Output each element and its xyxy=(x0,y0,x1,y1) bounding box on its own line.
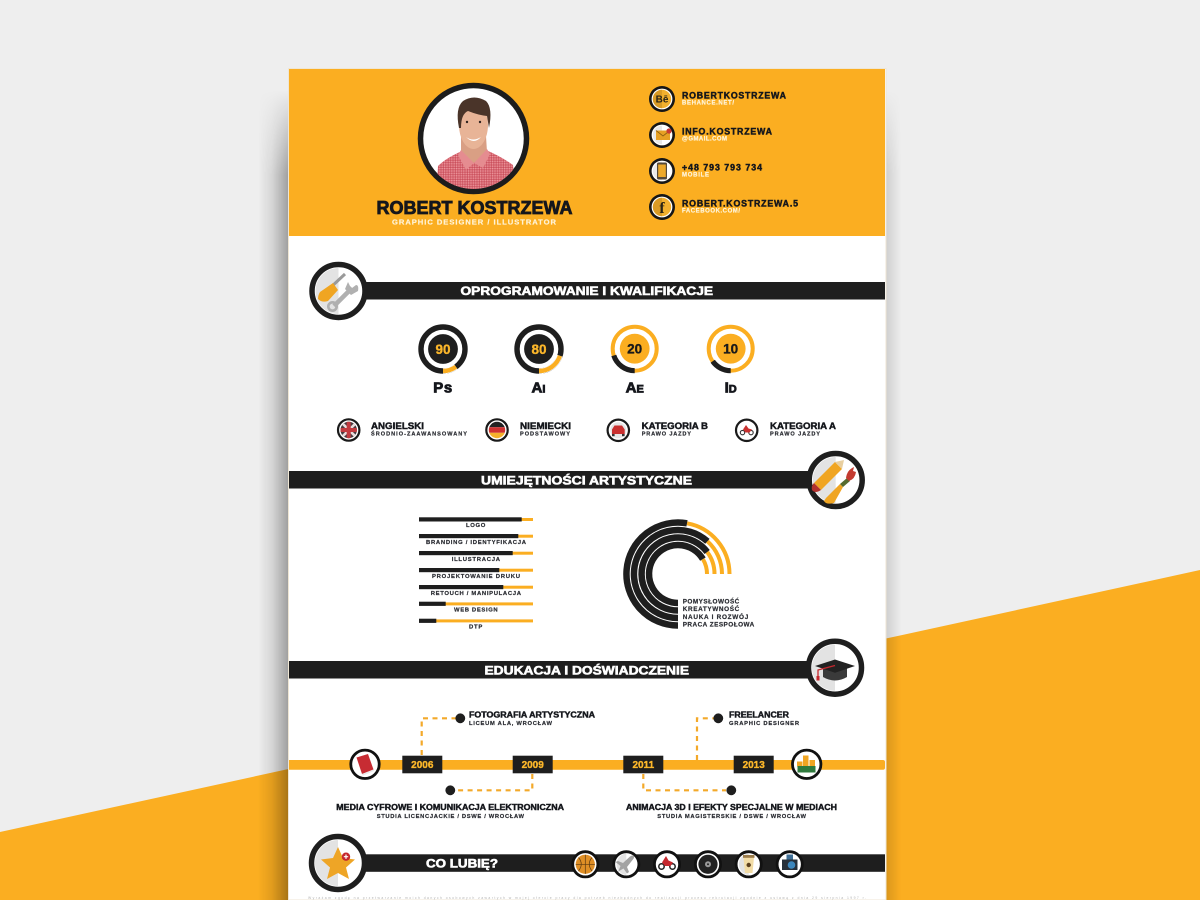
contact: email: @GMAIL.COM xyxy=(682,137,727,143)
language: English xyxy=(338,419,467,441)
contact: facebook xyxy=(649,194,798,220)
radial chart legend: PRACA ZESPOŁOWA xyxy=(683,622,755,629)
contact: phone: MOBILE xyxy=(682,173,709,179)
event: freelancer: FREELANCER xyxy=(729,709,790,719)
icon: camera xyxy=(777,852,802,877)
year: 2011: 2011 xyxy=(632,760,655,771)
contact: phone: +48 793 793 734 xyxy=(682,162,762,172)
section heading: software xyxy=(312,264,885,318)
skill ring: Ps 90: Ps xyxy=(433,379,453,396)
contact: facebook: ROBERT.KOSTRZEWA.5 xyxy=(682,198,798,208)
page shadow xyxy=(258,90,901,900)
radial chart legend: NAUKA I ROZWÓJ xyxy=(683,612,749,621)
contact: facebook: FACEBOOK.COM/ xyxy=(682,209,740,215)
year: 2009 xyxy=(513,756,553,773)
event: photography: FOTOGRAFIA ARTYSTYCZNA xyxy=(469,709,596,719)
year: 2009: 2009 xyxy=(522,760,544,771)
year: 2011 xyxy=(623,756,663,773)
contact: email xyxy=(649,122,773,148)
icon: graduation cap xyxy=(808,641,862,694)
job title: GRAPHIC DESIGNER / ILLUSTRATOR xyxy=(392,218,557,227)
bar: dtp: DTP xyxy=(469,624,482,630)
event: freelancer xyxy=(713,709,800,727)
event: photography: LICEUM ALA, WROCŁAW xyxy=(469,721,553,727)
licence: category A xyxy=(736,420,836,441)
timeline xyxy=(289,709,885,820)
event: master studies: STUDIA MAGISTERSKIE / DSWE / WROCŁAW xyxy=(657,814,807,820)
skill ring: Ai 80 xyxy=(517,327,561,396)
section heading: education xyxy=(289,641,862,694)
icon: plane xyxy=(614,852,639,877)
contact: behance xyxy=(649,86,787,112)
page sheet xyxy=(288,68,886,900)
event: freelancer: GRAPHIC DESIGNER xyxy=(729,721,800,727)
section heading: interests xyxy=(312,836,885,890)
section heading: software: OPROGRAMOWANIE I KWALIFIKACJE xyxy=(460,284,713,298)
bar: logo: LOGO xyxy=(466,523,486,529)
skill ring: Ae 20 xyxy=(613,327,657,396)
event: master studies xyxy=(626,785,837,820)
dashed connectors xyxy=(422,718,726,790)
skill ring: Ae 20: 20 xyxy=(627,342,642,357)
contact: behance: BEHANCE.NET/ xyxy=(682,101,734,107)
section heading: artistic skills: UMIEJĘTNOŚCI ARTYSTYCZNE xyxy=(481,472,692,487)
icon: motorbike xyxy=(654,852,680,877)
radial chart legend: KREATYWNOŚĆ xyxy=(683,604,740,613)
year: 2013: 2013 xyxy=(743,760,765,771)
icon: pencil and brush xyxy=(809,454,862,506)
licence: category B: PRAWO JAZDY xyxy=(642,432,691,438)
language: German: NIEMIECKI xyxy=(520,421,571,432)
year: 2013 xyxy=(734,756,774,773)
skill ring: Ai 80: AI xyxy=(532,379,545,396)
skill ring: Id 10: ID xyxy=(725,379,737,396)
section heading: education: EDUKACJA I DOŚWIADCZENIE xyxy=(484,662,689,677)
icon: star xyxy=(312,836,364,890)
icon: vinyl xyxy=(695,852,721,877)
year: 2006: 2006 xyxy=(411,760,434,771)
name: ROBERT KOSTRZEWA xyxy=(376,198,572,218)
section heading: interests: CO LUBIĘ? xyxy=(426,857,498,871)
bar: branding: BRANDING / IDENTYFIKACJA xyxy=(426,540,527,546)
licence: category B: KATEGORIA B xyxy=(642,421,708,432)
skill ring: Ai 80: 80 xyxy=(531,342,547,357)
bar: illustration: ILLUSTRACJA xyxy=(452,557,501,563)
skill ring: Ae 20: AE xyxy=(626,379,644,396)
language: German: PODSTAWOWY xyxy=(520,432,570,438)
bar: retouch: RETOUCH / MANIPULACJA xyxy=(431,591,522,597)
language: German xyxy=(486,419,571,441)
event: bachelor studies: STUDIA LICENCJACKIE / DSWE / WROCŁAW xyxy=(377,814,525,820)
icon: book xyxy=(351,750,379,778)
skill ring: Id 10 xyxy=(709,327,753,396)
contact: facebook: f xyxy=(659,200,665,217)
radial chart: soft skills xyxy=(626,522,755,629)
header panel xyxy=(289,69,885,236)
language: English: ANGIELSKI xyxy=(371,421,424,432)
radial chart legend: POMYSŁOWOŚĆ xyxy=(683,596,740,605)
event: bachelor studies: MEDIA CYFROWE I KOMUNIKACJA ELEKTRONICZNA xyxy=(336,802,565,812)
icon: tools xyxy=(312,264,365,318)
footer text: Wyrażam zgodę na przetwarzanie moich danych osobowych zawartych w mojej ofercie pracy dla potrzeb niezbędnych do realizacji procesu rekrutacji zgodnie z ustawą z dnia 29 sierpnia 1997 r. xyxy=(308,896,866,900)
event: photography xyxy=(455,709,596,727)
licence: category A: KATEGORIA A xyxy=(770,421,836,432)
year: 2006 xyxy=(402,756,442,773)
licence: category B xyxy=(608,420,708,441)
event: bachelor studies xyxy=(336,785,565,820)
icon: money xyxy=(792,750,821,778)
skill ring: Ps 90: 90 xyxy=(435,342,451,357)
icon: basketball xyxy=(573,852,598,877)
skill ring: Id 10: 10 xyxy=(723,342,738,357)
section heading: artistic skills xyxy=(289,454,862,506)
icon: coffee xyxy=(736,852,761,877)
skill ring: Ps 90 xyxy=(421,327,465,396)
contact: behance: ROBERTKOSTRZEWA xyxy=(682,90,787,100)
language: English: ŚRODNIO-ZAAWANSOWANY xyxy=(371,431,467,438)
bar: print design: PROJEKTOWANIE DRUKU xyxy=(432,574,520,580)
bar chart: artistic skills xyxy=(419,517,533,630)
profile photo xyxy=(420,86,526,200)
licence: category A: PRAWO JAZDY xyxy=(770,432,820,438)
contact: email: INFO.KOSTRZEWA xyxy=(682,126,773,136)
bar: web design: WEB DESIGN xyxy=(454,608,498,614)
contact: behance: Bē xyxy=(656,94,669,106)
radial chart legend xyxy=(683,596,755,629)
event: master studies: ANIMACJA 3D I EFEKTY SPECJALNE W MEDIACH xyxy=(626,802,837,812)
contact: phone xyxy=(649,158,762,184)
